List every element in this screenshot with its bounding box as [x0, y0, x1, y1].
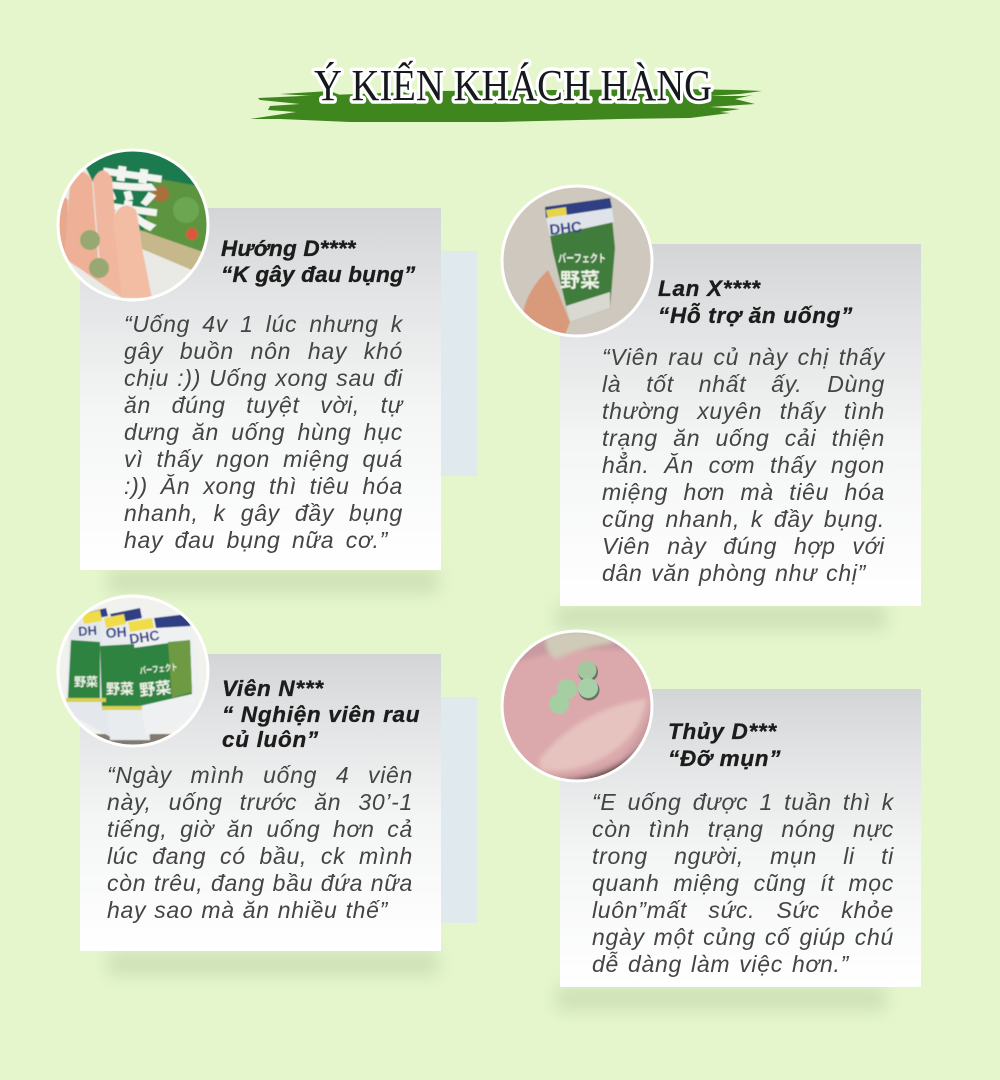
customer name and headline: “ Nghiện viên rau: [222, 702, 420, 726]
review quote: lúc đang có bầu, ck mình: [107, 843, 413, 869]
review quote: trong người, mụn li ti: [592, 843, 894, 869]
review quote: hẳn. Ăn cơm thấy ngon: [602, 452, 885, 478]
review quote: ngày một củng cố giúp chú: [592, 924, 894, 950]
review quote: gây buồn nôn hay khó: [124, 338, 403, 364]
icon: photo of tablets in palm: [500, 630, 654, 782]
customer name and headline: củ luôn”: [222, 727, 319, 752]
review quote: :)) Ăn xong thì tiêu hóa: [124, 473, 403, 499]
review quote: là tốt nhất ấy. Dùng: [602, 371, 885, 397]
icon: photo of hand holding DHC pack: [500, 184, 654, 338]
review quote: dễ dàng làm việc hơn.”: [592, 951, 849, 977]
review quote: hay sao mà ăn nhiều thế”: [107, 897, 388, 923]
customer name and headline: [658, 276, 853, 328]
panel: Thủy D review: [500, 630, 921, 1014]
icon: photo of three DHC packs: 野菜: [74, 673, 98, 690]
icon: photo of three DHC packs: DHC: [128, 627, 160, 647]
icon: photo of hand holding DHC pack: DHC: [549, 219, 583, 239]
review quote: [107, 762, 413, 923]
review quote: ăn đúng tuyệt vời, tự: [124, 392, 403, 418]
icon: photo of hand holding DHC pack: 野菜: [560, 264, 600, 293]
icon: photo of hand holding DHC pack: パーフェクト: [558, 250, 606, 266]
icon: photo of three DHC packs: DH: [78, 623, 98, 639]
heading text: Ý KIẾN KHÁCH HÀNG: [314, 60, 712, 110]
icon: photo of three DHC packs: 野菜: [138, 674, 172, 701]
panel: Hương D review: [56, 148, 477, 597]
review quote: vì thấy ngon miệng quá: [124, 446, 403, 472]
review quote: quanh miệng cũng ít mọc: [592, 870, 894, 896]
review quote: dân văn phòng như chị”: [602, 560, 866, 586]
review quote: tiếng, giờ ăn uống hơn cả: [107, 816, 413, 842]
panel: Viên N review: [56, 594, 477, 979]
icon: photo of three DHC packs: [56, 594, 210, 748]
icon: photo of three DHC packs: 野菜: [106, 679, 134, 699]
review quote: này, uống trước ăn 30’-1: [107, 789, 413, 815]
icon: photo of three DHC packs: パーフェクト: [139, 660, 178, 677]
icon: photo of hand holding tablets: [56, 148, 210, 302]
review quote: còn trêu, đang bầu đứa nữa: [107, 870, 413, 896]
review quote: [592, 789, 894, 977]
customer name and headline: “Hỗ trợ ăn uống”: [658, 303, 853, 328]
review quote: luôn”mất sức. Sức khỏe: [592, 897, 894, 923]
review quote: [602, 344, 886, 586]
review quote: Viên này đúng hợp với: [602, 533, 885, 559]
brush stroke: [250, 89, 762, 122]
review quote: “Uống 4v 1 lúc nhưng k: [124, 311, 403, 337]
review quote: miệng hơn mà tiêu hóa: [602, 479, 885, 505]
customer name and headline: “Đỡ mụn”: [668, 746, 781, 771]
review quote: chịu :)) Uống xong sau đi: [124, 365, 403, 391]
customer name and headline: [668, 719, 781, 771]
customer name and headline: [221, 236, 416, 287]
panel: Lan X review: [500, 184, 921, 633]
review quote: “E uống được 1 tuần thì k: [592, 789, 894, 815]
review quote: trạng ăn uống cải thiện: [602, 425, 885, 451]
review quote: cũng nhanh, k đầy bụng.: [602, 506, 885, 532]
review quote: “Viên rau củ này chị thấy: [602, 344, 885, 370]
review quote: thường xuyên thấy tình: [602, 398, 885, 424]
review quote: nhanh, k gây đầy bụng: [124, 500, 403, 526]
customer name and headline: Lan X****: [658, 276, 761, 301]
customer name and headline: Thủy D***: [668, 719, 777, 744]
customer name and headline: “K gây đau bụng”: [221, 262, 415, 287]
review quote: [124, 311, 404, 553]
review quote: còn tình trạng nóng nực: [592, 816, 894, 842]
icon: photo of three DHC packs: OH: [105, 624, 127, 641]
review quote: hay đau bụng nữa cơ.”: [124, 527, 388, 553]
customer name and headline: [222, 676, 420, 752]
customer name and headline: Viên N***: [222, 676, 324, 701]
review quote: “Ngày mình uống 4 viên: [107, 762, 413, 788]
title: brush stroke banner with heading: [250, 57, 762, 122]
review quote: dưng ăn uống hùng hục: [124, 419, 403, 445]
customer name and headline: Hướng D****: [221, 236, 356, 261]
